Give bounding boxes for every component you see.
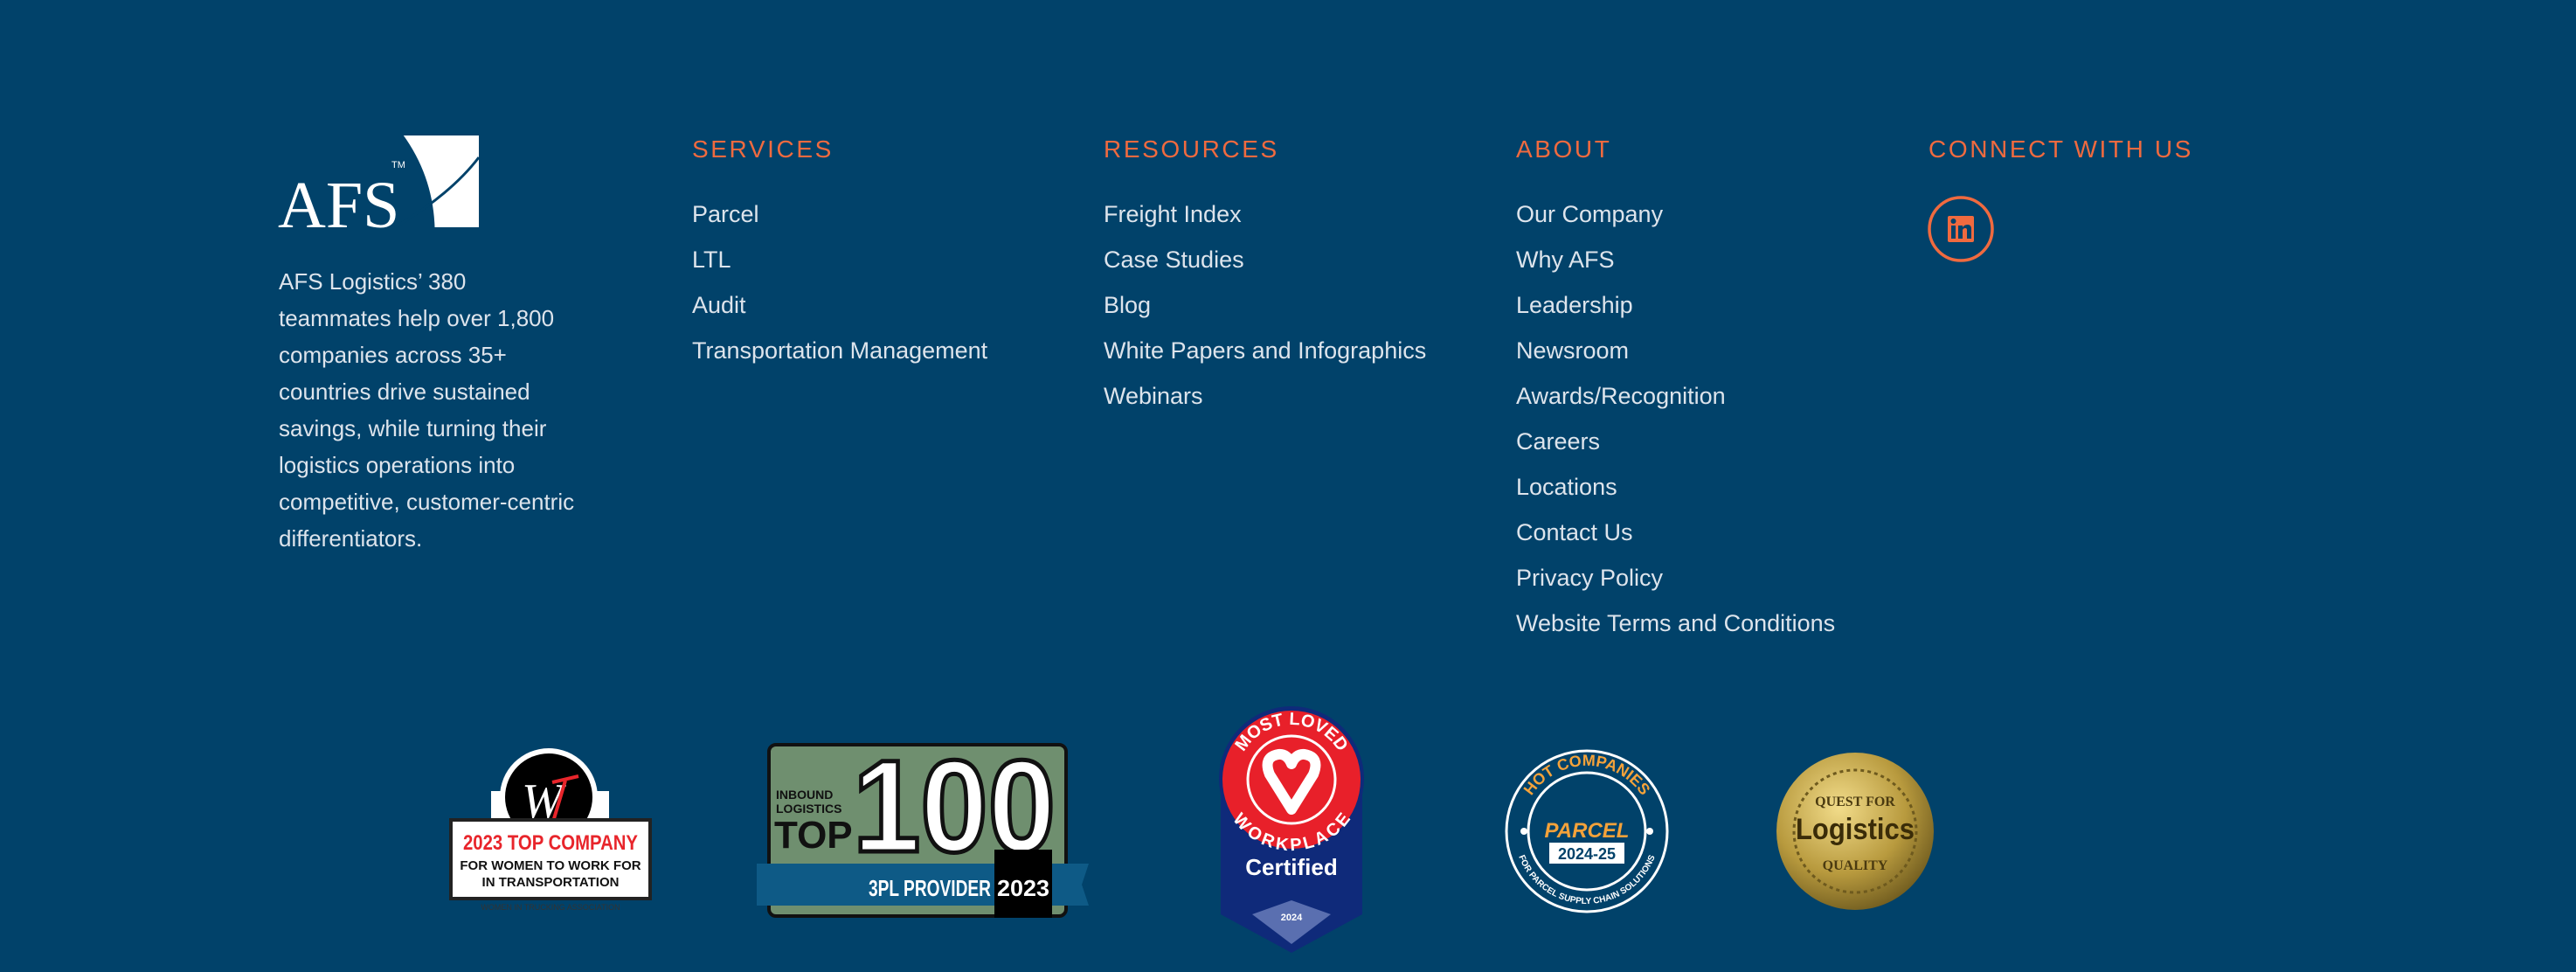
links: services: LTL: [692, 246, 731, 273]
badge: inbound logistics top 100: TOP: [774, 814, 853, 857]
links: resources: [1104, 201, 1426, 409]
links: about: Contact Us: [1516, 519, 1633, 545]
links: about: Careers: [1516, 428, 1600, 455]
links: about: Awards/Recognition: [1516, 383, 1726, 409]
links: about: Leadership: [1516, 292, 1633, 318]
badge: quest for quality: Logistics: [1796, 813, 1915, 846]
text: company description: AFS Logistics’ 380: [279, 268, 466, 295]
badge: inbound logistics top 100: INBOUND: [776, 788, 833, 802]
heading: about: ABOUT: [1516, 135, 1611, 163]
text: company description: countries drive sustained: [279, 378, 530, 405]
badge: most loved workplace: [1219, 706, 1364, 953]
badge: women in trucking: [449, 748, 652, 912]
links: about: Locations: [1516, 474, 1617, 500]
links: services: [692, 201, 987, 364]
badge: parcel hot companies: 2024-25: [1558, 845, 1616, 863]
badge: parcel hot companies: HOT COMPANIES: [1523, 754, 1650, 795]
text: company description: differentiators.: [279, 525, 422, 552]
text: company description: teammates help over 1,800: [279, 305, 554, 331]
logo: AFS: [278, 135, 479, 231]
links: about: [1516, 201, 1835, 636]
links: services: Audit: [692, 292, 746, 318]
text: company description: [279, 268, 574, 552]
links: resources: Case Studies: [1104, 246, 1244, 273]
badge: inbound logistics top 100: 3PL PROVIDER: [869, 875, 991, 901]
links: resources: White Papers and Infographics: [1104, 337, 1426, 364]
links: resources: Blog: [1104, 292, 1151, 318]
badge: most loved workplace: MOST LOVED: [1234, 712, 1347, 752]
badge: most loved workplace: WORKPLACE: [1234, 811, 1351, 851]
heading: connect with us: CONNECT WITH US: [1929, 135, 2193, 163]
logo: AFS: TM: [391, 160, 405, 170]
badge: women in trucking: W: [522, 774, 566, 829]
badge: parcel hot companies: PARCEL: [1545, 819, 1629, 843]
badge: parcel hot companies: FOR PARCEL SUPPLY CHAIN SOLUTIONS: [1519, 855, 1655, 904]
badge: women in trucking: IN TRANSPORTATION: [482, 875, 619, 890]
heading: services: SERVICES: [692, 135, 834, 163]
text: company description: companies across 35+: [279, 342, 507, 368]
badge: inbound logistics top 100: LOGISTICS: [776, 802, 841, 816]
links: resources: Freight Index: [1104, 201, 1242, 227]
heading: resources: RESOURCES: [1104, 135, 1279, 163]
links: resources: Webinars: [1104, 383, 1203, 409]
badge: inbound logistics top 100: 2023: [997, 875, 1049, 901]
links: services: Parcel: [692, 201, 759, 227]
links: about: Our Company: [1516, 201, 1663, 227]
links: about: Newsroom: [1516, 337, 1629, 364]
badge: most loved workplace: Certified: [1245, 854, 1338, 880]
links: about: Website Terms and Conditions: [1516, 610, 1835, 636]
links: about: Privacy Policy: [1516, 565, 1663, 591]
text: company description: competitive, customer-centric: [279, 489, 574, 515]
links: about: Why AFS: [1516, 246, 1615, 273]
badge: inbound logistics top 100: [757, 741, 1089, 918]
badge: most loved workplace: 2024: [1281, 913, 1303, 923]
badge: quest for quality: QUEST FOR: [1815, 795, 1895, 809]
badge: quest for quality: QUALITY: [1823, 858, 1888, 873]
text: company description: logistics operations into: [279, 452, 515, 478]
badge: women in trucking: WOMEN IN TRUCKING ASSOCIATION: [481, 903, 620, 912]
badge: parcel hot companies: [1505, 750, 1669, 913]
text: company description: savings, while turning their: [279, 415, 546, 441]
icon: linkedin: [1928, 196, 1994, 262]
links: services: Transportation Management: [692, 337, 987, 364]
badge: quest for quality: [1776, 753, 1934, 910]
badge: women in trucking: FOR WOMEN TO WORK FOR: [460, 858, 641, 873]
